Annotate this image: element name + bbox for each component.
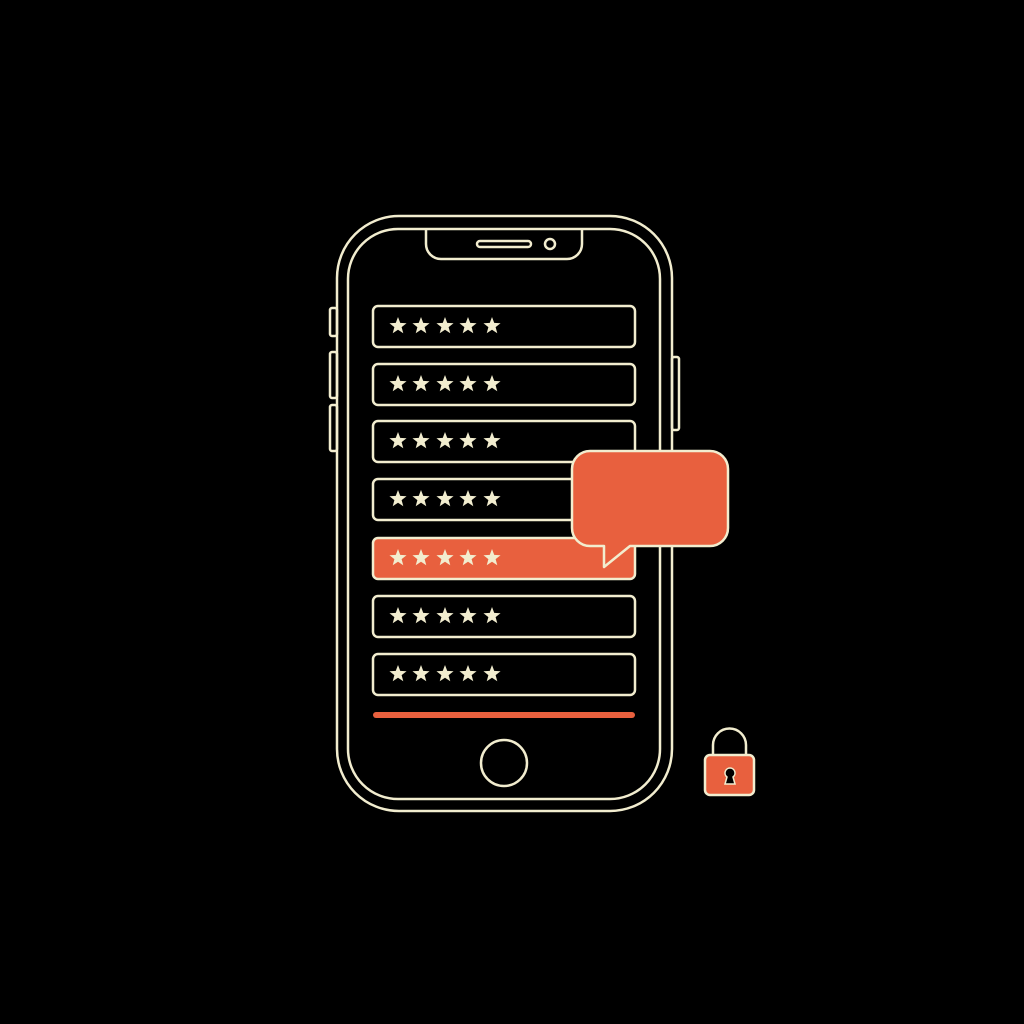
home button	[481, 740, 527, 786]
phone outer frame	[337, 216, 672, 811]
phone inner screen	[348, 229, 660, 799]
phone	[330, 216, 679, 811]
notch	[426, 229, 582, 259]
rating rows	[373, 306, 635, 695]
progress bar	[373, 712, 635, 718]
speaker	[477, 241, 531, 247]
camera	[545, 239, 555, 249]
speech bubble	[572, 451, 728, 567]
icon: padlock	[705, 728, 754, 795]
side buttons	[330, 308, 679, 451]
